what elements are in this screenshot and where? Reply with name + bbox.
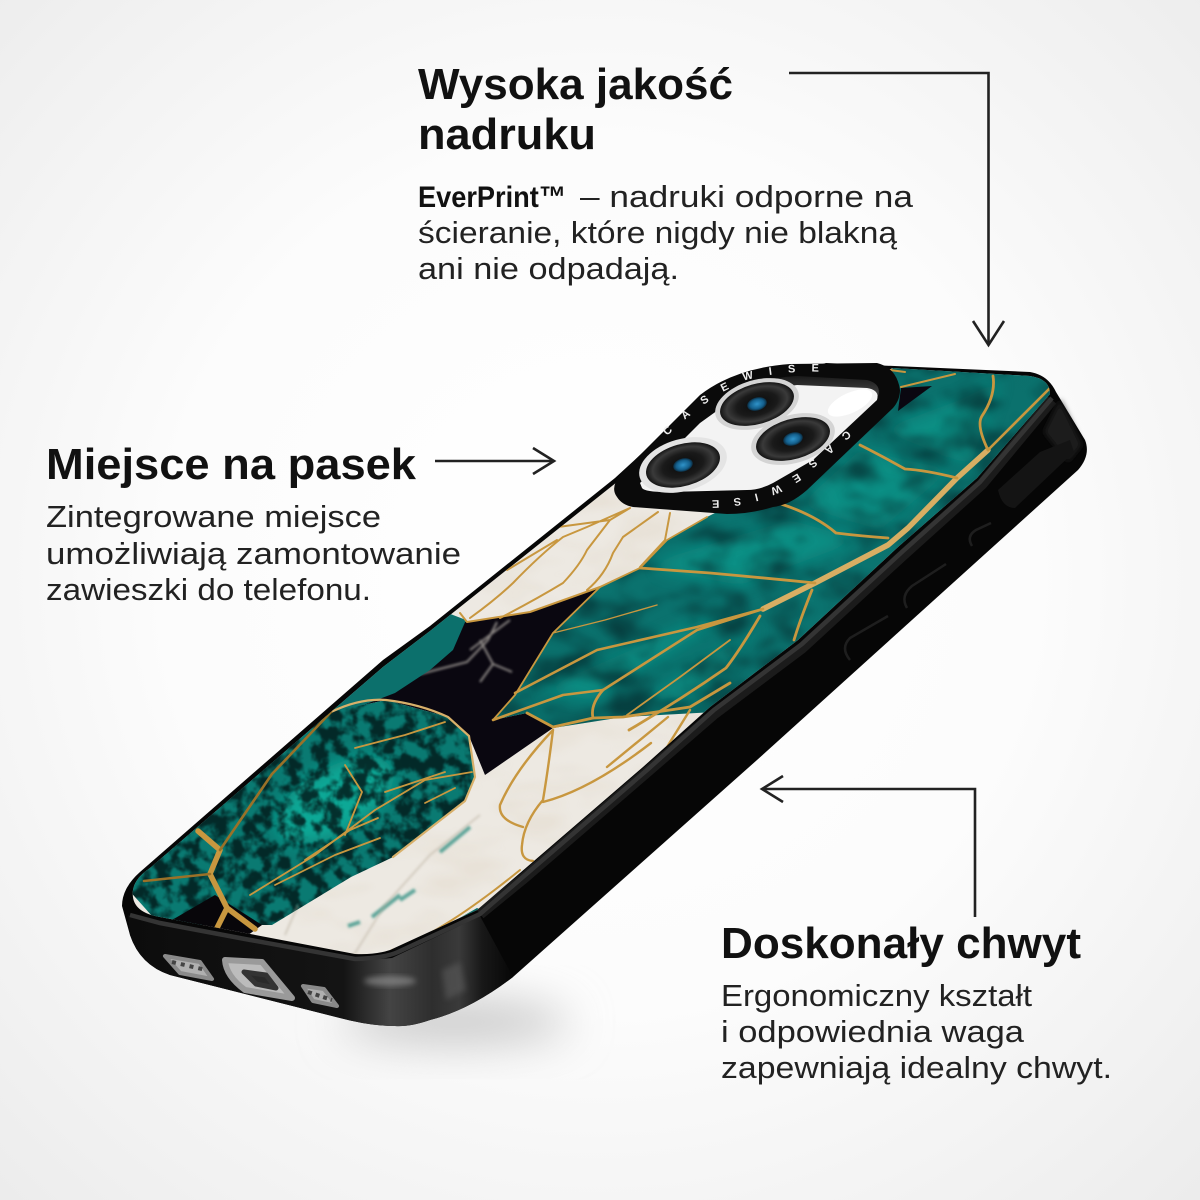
camera module (614, 363, 900, 514)
lower teal streaks (348, 827, 470, 926)
callout: grip (721, 919, 1112, 1085)
text: grip description: Ergonomiczny kształt (721, 979, 1033, 1013)
heading: Miejsce na pasek: Miejsce na pasek (46, 440, 417, 489)
front bottom wall (128, 915, 513, 1026)
text: grip description (721, 979, 1112, 1085)
right lens (745, 404, 841, 474)
heading: Wysoka jakość nadruku (418, 60, 733, 159)
brand text bottom: CASEWISE (712, 432, 850, 508)
case artwork: marble and gold (132, 368, 1050, 954)
arrow: to case surface (789, 73, 1004, 345)
side bump (998, 440, 1074, 508)
teal fill (496, 368, 1050, 728)
rim (130, 398, 1052, 959)
left lens (633, 428, 733, 502)
bottom right teal sliver (459, 908, 478, 918)
text: EverPrint description: EverPrint™ (418, 181, 566, 214)
right speaker holes (308, 992, 332, 1000)
grey marble streaks (285, 815, 480, 958)
volume up button (904, 564, 946, 608)
bright centre (272, 750, 400, 848)
gold veins: upper white leaf (460, 508, 670, 622)
usb-c opening (244, 972, 276, 988)
gold veins: lower white marble (500, 710, 690, 861)
camera bezel (614, 363, 900, 514)
cloudy dark texture (498, 368, 1050, 727)
volume down button (845, 616, 888, 660)
right speaker (303, 986, 337, 1006)
textured teal orb (132, 701, 474, 925)
white marble base (132, 368, 1050, 954)
case body (122, 363, 1087, 1026)
teal sliver (321, 614, 466, 720)
black lower corner (173, 895, 262, 934)
white streaks on black marble (420, 620, 512, 682)
heading: Wysoka jakość nadruku: Wysoka jakość (418, 60, 733, 109)
small black wedge (898, 386, 932, 411)
callout: strap slot (46, 440, 461, 607)
arrow: to strap slot (435, 448, 554, 474)
black marble (364, 589, 596, 775)
callout: print quality (418, 60, 913, 286)
text: EverPrint description: ani nie odpadają. (418, 252, 679, 286)
lighter patches (540, 380, 1000, 710)
mottled texture (132, 701, 474, 925)
heading: Doskonały chwyt: Doskonały chwyt (721, 919, 1081, 968)
gold veins: upper leaves (493, 370, 1050, 730)
action button (970, 523, 991, 546)
teal fill (132, 701, 474, 925)
text: EverPrint description (418, 180, 913, 286)
left speaker holes (172, 962, 206, 970)
text: grip description: zapewniają idealny chwyt. (721, 1051, 1112, 1085)
phone shadow (340, 1000, 570, 1044)
bottom right gold edge (392, 870, 520, 950)
heading: Wysoka jakość nadruku: nadruku (418, 110, 596, 159)
side wall highlight (480, 400, 1052, 914)
corner reflections (364, 962, 466, 1000)
text: EverPrint description: ścieranie, które nigdy nie blakną (418, 216, 897, 250)
text: strap slot description: Zintegrowane miejsce (46, 500, 381, 534)
arrow: to case side (762, 776, 975, 917)
camera inner lip (745, 376, 879, 398)
leaf outline gold (493, 517, 707, 720)
phone in black case (122, 363, 1087, 1026)
glass highlight (824, 384, 876, 422)
marble veining (418, 496, 664, 932)
top corner sheen (1044, 400, 1082, 462)
text: grip description: i odpowiednia waga (721, 1015, 1024, 1049)
text: strap slot description: umożliwiają zamontowanie (46, 537, 461, 571)
text: strap slot description (46, 500, 461, 607)
text: strap slot description: zawieszki do telefonu. (46, 573, 371, 607)
camera glass (640, 385, 878, 492)
brand text top: CASEWISE (664, 364, 818, 434)
top lens (709, 369, 805, 439)
left speaker (165, 956, 212, 979)
side buttons (845, 523, 991, 660)
usb-c port surround (225, 960, 292, 998)
bottom ports (165, 956, 337, 1006)
gold veins: orb outline and cracks (144, 700, 475, 936)
text: EverPrint description: – nadruki odporne na (580, 180, 913, 214)
upper teal leaves (496, 368, 1050, 728)
